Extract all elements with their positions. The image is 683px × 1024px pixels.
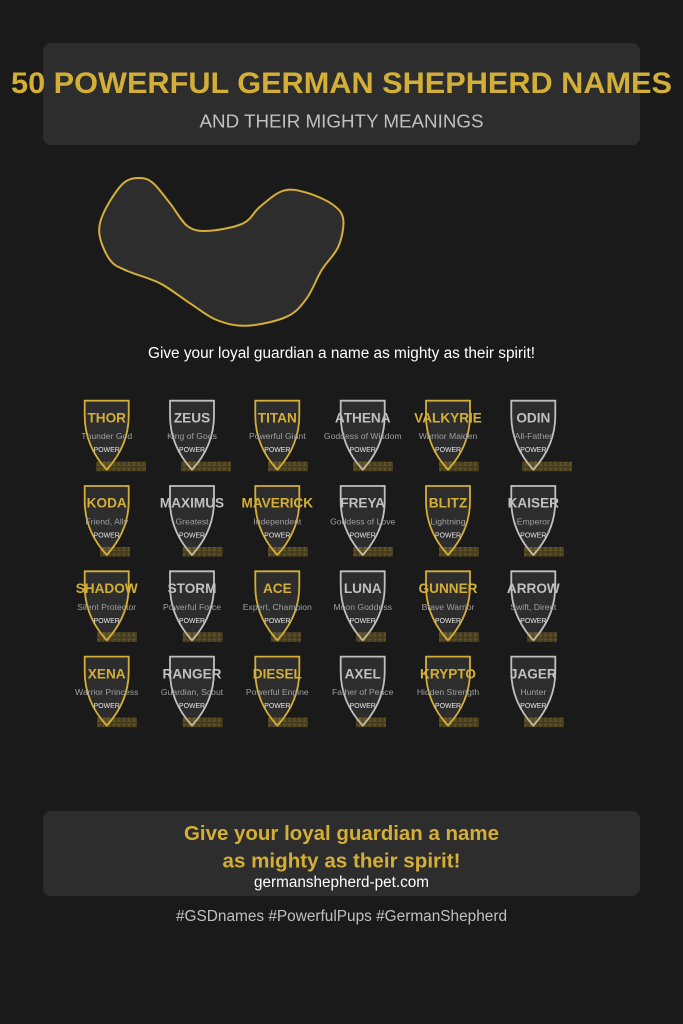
card: Shadow: POWER (94, 618, 120, 625)
hashtags: #GSDnames #PowerfulPups #GermanShepherd (176, 908, 507, 925)
card: Xena: XENA (88, 666, 126, 681)
card: Maverick: Independent (253, 516, 302, 526)
card: Thor: Thunder God (81, 431, 132, 441)
card: Xena: Warrior Princess (75, 687, 138, 697)
card: Valkyrie (414, 401, 482, 471)
card: Kaiser: KAISER (508, 496, 559, 511)
card: Thor: POWER (94, 447, 120, 454)
card: Gunner (419, 571, 479, 642)
title: 50 POWERFUL GERMAN SHEPHERD NAMES (11, 67, 672, 100)
card: Kaiser: Emperor (517, 516, 550, 526)
footer call to action (184, 823, 499, 872)
card: Koda (85, 486, 130, 556)
card: Athena: ATHENA (335, 410, 391, 425)
card: Axel: Father of Peace (332, 687, 394, 697)
card: Odin: ODIN (516, 410, 550, 425)
card: Odin: POWER (520, 447, 546, 454)
card: Maximus (160, 486, 224, 556)
card: Titan: POWER (264, 447, 290, 454)
card: Ace: POWER (264, 618, 290, 625)
footer panel (43, 811, 640, 896)
card: Blitz: Lightning (430, 516, 466, 526)
card: Freya: POWER (350, 532, 376, 540)
card: Ace (243, 571, 312, 642)
card: Athena: POWER (350, 447, 376, 454)
card: Gunner: POWER (435, 618, 461, 625)
card: Odin: All-Father (515, 431, 552, 441)
card: Gunner: GUNNER (419, 581, 478, 596)
card: Thor (81, 401, 146, 471)
card: Ranger: POWER (179, 703, 205, 710)
card: Kaiser: POWER (520, 532, 546, 540)
card: Jager (510, 657, 564, 727)
footer call to action: Give your loyal guardian a name (184, 823, 499, 845)
card: Valkyrie: VALKYRIE (414, 410, 482, 425)
card: Blitz: BLITZ (429, 496, 467, 511)
card: Shadow: Silent Protector (77, 602, 136, 612)
card: Ranger (161, 657, 224, 727)
card: Koda: KODA (87, 496, 127, 511)
card: Luna: LUNA (344, 581, 382, 596)
card: Zeus (167, 401, 231, 471)
card: Luna: POWER (350, 618, 376, 625)
card: Valkyrie: Warrior Maiden (419, 431, 478, 441)
card: Athena: Goddess of Wisdom (324, 431, 402, 441)
card: Valkyrie: POWER (435, 447, 461, 454)
card: Zeus: King of Gods (167, 431, 217, 441)
card: Blitz (426, 486, 479, 556)
card: Zeus: POWER (179, 447, 205, 454)
card: Arrow: POWER (520, 618, 546, 625)
card: Freya (330, 486, 396, 556)
card: Shadow (76, 571, 138, 642)
card: Krypto: KRYPTO (420, 666, 476, 681)
card: Arrow: ARROW (507, 581, 560, 596)
names grid (75, 401, 572, 727)
card: Maverick: MAVERICK (242, 496, 313, 511)
card: Jager: JAGER (510, 666, 557, 681)
card: Ace: ACE (263, 581, 292, 596)
card: Axel: POWER (350, 703, 376, 710)
card: Kaiser (508, 486, 564, 556)
card: Titan: TITAN (258, 410, 297, 425)
subtitle: AND THEIR MIGHTY MEANINGS (200, 110, 484, 132)
card: Freya: FREYA (340, 496, 385, 511)
card: Diesel: DIESEL (253, 666, 302, 681)
card: Diesel: POWER (264, 703, 290, 710)
card: Ranger: Guardian, Scout (161, 687, 224, 697)
card: Krypto: POWER (435, 703, 461, 710)
card: Blitz: POWER (435, 532, 461, 540)
card: Maximus: Greatest (175, 516, 209, 526)
card: Xena (75, 657, 138, 727)
card: Koda: Friend, Ally (85, 516, 129, 526)
card: Diesel (246, 657, 309, 727)
card: Maximus: MAXIMUS (160, 496, 224, 511)
card: Luna: Moon Goddess (333, 602, 392, 612)
header panel (11, 43, 672, 145)
card: Storm: POWER (179, 618, 205, 625)
footer call to action: as mighty as their spirit! (222, 850, 460, 872)
card: Storm (163, 571, 223, 642)
website: germanshepherd-pet.com (254, 874, 429, 891)
card: Gunner: Brave Warrior (422, 602, 475, 612)
card: Titan (249, 401, 308, 471)
card: Krypto: Hidden Strength (417, 687, 479, 697)
card: Axel (332, 657, 394, 727)
card: Xena: POWER (94, 703, 120, 710)
card: Athena (324, 401, 402, 471)
card: Odin (511, 401, 572, 471)
card: Freya: Goddess of Love (330, 516, 396, 526)
card: Ranger: RANGER (163, 666, 222, 681)
card: Arrow (507, 571, 560, 642)
card: Luna (333, 571, 392, 642)
card: Titan: Powerful Giant (249, 431, 306, 441)
card: Jager: Hunter (520, 687, 546, 697)
card: Zeus: ZEUS (174, 410, 210, 425)
card: Jager: POWER (520, 703, 546, 710)
tagline: Give your loyal guardian a name as mighty as their spirit! (148, 345, 535, 362)
card: Krypto (417, 657, 479, 727)
card: Shadow: SHADOW (76, 581, 138, 596)
card: Arrow: Swift, Direct (510, 602, 557, 612)
card: Maximus: POWER (179, 532, 205, 540)
card: Storm: STORM (168, 581, 216, 596)
dog silhouette blob (99, 178, 343, 326)
card: Maverick: POWER (264, 532, 290, 540)
card: Thor: THOR (87, 410, 126, 425)
card: Maverick (242, 486, 313, 556)
card: Axel: AXEL (345, 666, 381, 681)
card: Ace: Expert, Champion (243, 602, 312, 612)
card: Diesel: Powerful Engine (246, 687, 309, 697)
card: Koda: POWER (94, 532, 120, 540)
card: Storm: Powerful Force (163, 602, 221, 612)
